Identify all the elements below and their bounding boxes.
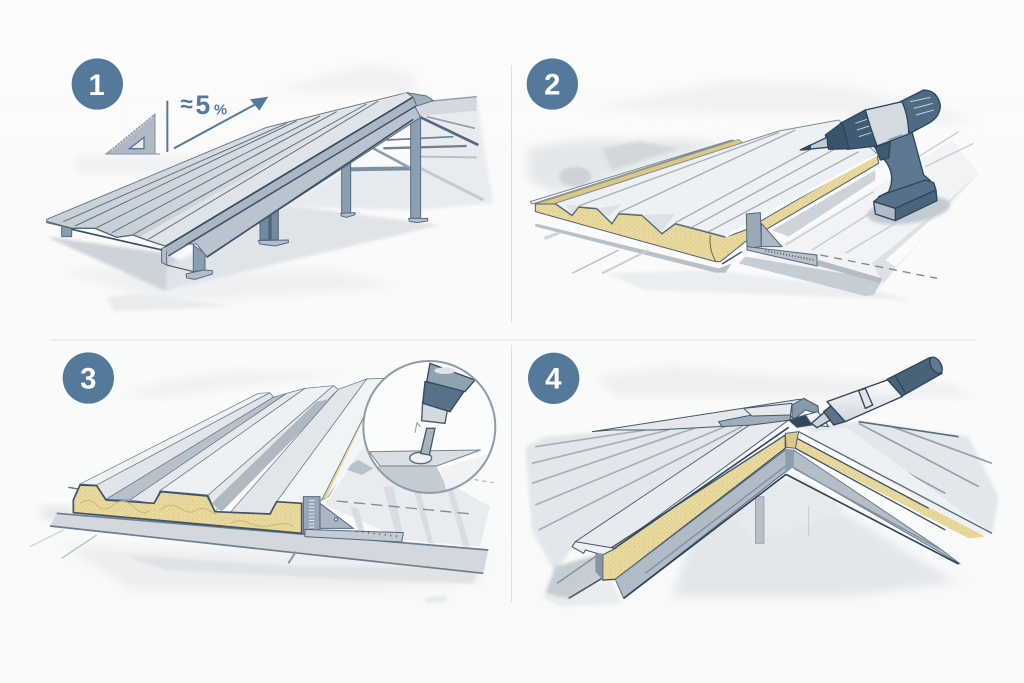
panel surface ribs [80,378,383,514]
sandwich panel top sheet [530,120,879,237]
icon: steel square [746,213,817,266]
ribbed deck to the right [325,447,493,547]
panel: step 3 fixing the panel [30,352,495,603]
panel: step 1 roof slope [47,58,493,312]
edge beams [165,93,433,257]
deck base rails [30,487,488,573]
deck beneath with ribs [535,132,979,296]
left roof slope [525,420,789,598]
background washes [47,65,493,312]
foam core cross-section [73,485,302,533]
number badge 3 [63,352,114,404]
steel ridge purlins [615,448,960,598]
foam core sections [603,427,985,580]
left panel end cap [572,542,615,580]
roof deck with ribs [47,93,413,250]
steel columns [62,117,428,279]
slope indicator: approximately 5 percent with arrow: 5 [195,90,210,120]
panel: step 2 laying the sandwich panel [527,58,979,300]
ridge flashing cap [592,398,829,432]
panel: step 4 ridge sealing [525,353,999,607]
number badge 1: 1 [89,69,105,102]
number badge 2: 2 [544,69,560,102]
number badge 4 [528,353,579,404]
icon: cordless drill [800,90,940,221]
right roof slope [799,422,999,533]
icon: set square [106,114,160,154]
icon: steel square [303,497,403,542]
icon: sealant cartridge [811,355,945,428]
slope indicator: approximately 5 percent with arrow: ≈ [180,91,193,117]
number badge 3: 3 [80,363,96,396]
magnified screw detail [363,361,495,500]
support post under the ridge [755,497,809,543]
illustration: four roof panel installation steps [30,58,999,606]
number badge 1 [72,58,123,110]
sandwich panel foam core [535,153,879,264]
number badge 4: 4 [545,363,562,396]
back framing [350,96,483,200]
slope indicator: approximately 5 percent with arrow: % [214,103,227,119]
dashed alignment line [820,255,937,278]
background washes and distant treeline [529,82,975,300]
slope indicator: approximately 5 percent with arrow [167,90,268,152]
number badge 2 [527,58,578,110]
background washes [40,372,483,603]
background washes [539,367,975,607]
